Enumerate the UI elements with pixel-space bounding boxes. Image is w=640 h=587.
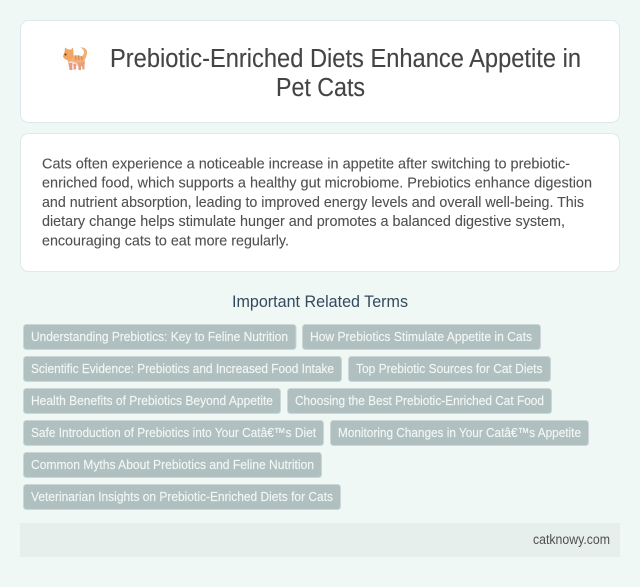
- tag: [24, 356, 342, 382]
- title: Prebiotic-Enriched Diets Enhance Appetite in: [110, 45, 581, 73]
- icon: orange cat: [63, 48, 87, 70]
- tag: Common Myths About Prebiotics and Feline Nutrition: [31, 457, 314, 472]
- tag: [348, 356, 550, 382]
- tag: How Prebiotics Stimulate Appetite in Cats: [310, 329, 532, 344]
- panel: related term tags: [24, 324, 588, 510]
- tag: Safe Introduction of Prebiotics into Your Catâ€™s Diet: [31, 425, 316, 440]
- tag: Top Prebiotic Sources for Cat Diets: [356, 361, 543, 376]
- text block: description: encouraging cats to eat more regularly.: [42, 232, 289, 250]
- tag: [24, 452, 322, 478]
- title: Pet Cats: [276, 74, 365, 102]
- tag: [24, 484, 340, 510]
- tag: [24, 420, 324, 446]
- panel: description card: [20, 134, 620, 272]
- text block: description: Cats often experience a noticeable increase in appetite after switching to prebiotic-: [42, 156, 570, 172]
- tag: [302, 324, 540, 350]
- tag: Monitoring Changes in Your Catâ€™s Appetite: [338, 425, 581, 440]
- tag: Veterinarian Insights on Prebiotic-Enriched Diets for Cats: [31, 489, 333, 504]
- footer: [20, 523, 620, 557]
- tag: Scientific Evidence: Prebiotics and Increased Food Intake: [31, 361, 334, 376]
- text block: description: dietary change helps stimulate hunger and promotes a balanced digestive system,: [42, 213, 565, 230]
- tag: [24, 324, 296, 350]
- tag: [288, 388, 552, 414]
- text block: description: and nutrient absorption, leading to improved energy levels and overall well-being. This: [42, 194, 584, 211]
- text block: description: enriched food, which supports a healthy gut microbiome. Prebiotics enhance digestion: [42, 174, 592, 192]
- heading: related terms: Important Related Terms: [232, 293, 408, 311]
- panel: title card: [20, 20, 620, 122]
- footer: catknowy.com: [533, 532, 610, 547]
- tag: Choosing the Best Prebiotic-Enriched Cat Food: [295, 393, 544, 408]
- text block: description: [42, 156, 592, 250]
- tag: Understanding Prebiotics: Key to Feline Nutrition: [31, 329, 288, 344]
- title: [110, 45, 581, 102]
- tag: [24, 388, 280, 414]
- tag: Health Benefits of Prebiotics Beyond Appetite: [31, 393, 273, 408]
- tag: [330, 420, 588, 446]
